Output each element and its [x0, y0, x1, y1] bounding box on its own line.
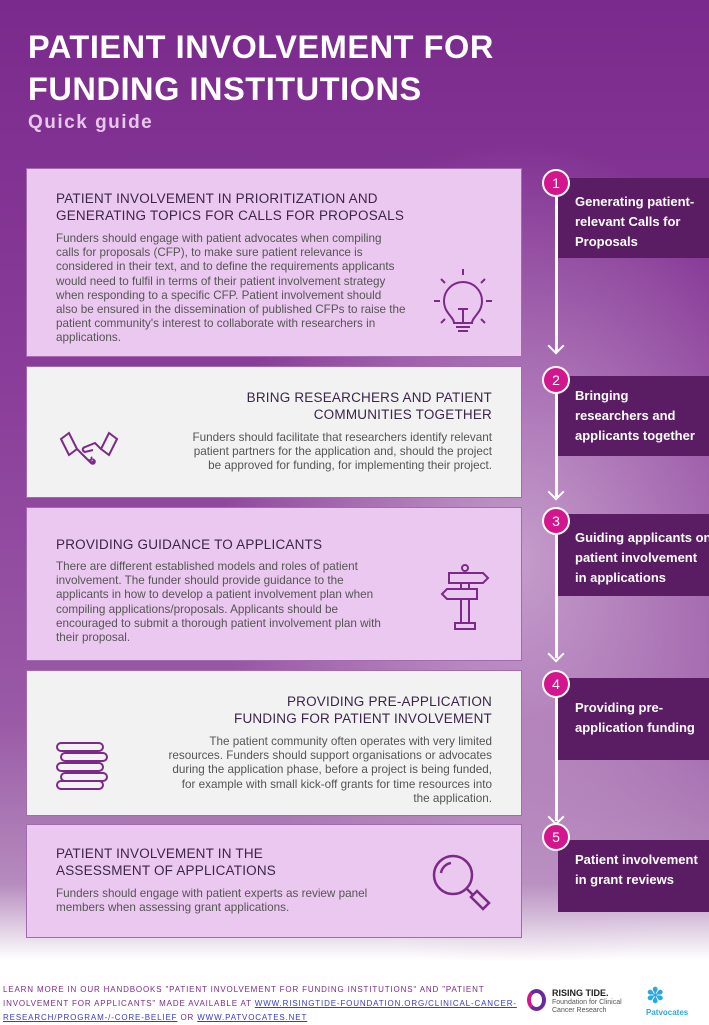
text 1: considered in their text, and to define the requirements applicants — [56, 260, 394, 273]
heading 2 — [247, 390, 492, 422]
text 1: when responding to a specific CFP. Patient involvement should — [56, 289, 381, 302]
title: PATIENT INVOLVEMENT FOR — [28, 29, 494, 65]
heading 5: PATIENT INVOLVEMENT IN THE — [56, 846, 263, 861]
icon: coins — [56, 742, 108, 790]
text 4: for example with small kick-off grants for time resources into — [182, 778, 492, 791]
footer text: RESEARCH/PROGRAM-/-CORE-BELIEF OR WWW.PATVOCATES.NET — [3, 1013, 307, 1022]
text 2 — [192, 431, 492, 472]
heading 5 — [56, 846, 276, 878]
text 2: Funders should facilitate that researchers identify relevant — [192, 431, 492, 444]
logo: rising tide — [527, 988, 622, 1014]
logo: patvocates: Patvocates — [646, 1008, 688, 1017]
subtitle: Quick guide — [28, 112, 153, 133]
text 4 — [168, 735, 492, 805]
heading 1: GENERATING TOPICS FOR CALLS FOR PROPOSALS — [56, 208, 404, 223]
text: Patient involvement — [575, 852, 698, 867]
text: Bringing — [575, 388, 628, 403]
text: in grant reviews — [575, 872, 674, 887]
text: patient involvement — [575, 550, 697, 565]
footer text: INVOLVEMENT FOR APPLICANTS" MADE AVAILABLE AT WWW.RISINGTIDE-FOUNDATION.ORG/CLINICAL-CANCER- — [3, 999, 517, 1008]
logo: rising tide: RISING TIDE. — [552, 988, 609, 998]
text 1 — [56, 232, 406, 344]
footer text — [3, 985, 517, 1022]
panel 1 — [26, 168, 522, 357]
text 3: encouraged to submit a thorough patient involvement plan with — [56, 617, 381, 630]
title: FUNDING INSTITUTIONS — [28, 71, 422, 107]
panel 3 — [26, 507, 522, 661]
text: 2 — [552, 372, 560, 388]
text 1: patient community's interest to collaborate with researchers in — [56, 317, 375, 330]
text: 5 — [552, 829, 560, 845]
text 3: applicants in how to develop a patient involvement plan when — [56, 588, 373, 601]
text: relevant Calls for — [575, 214, 680, 229]
text 4: The patient community often operates with very limited — [209, 735, 492, 748]
panel 4 — [26, 670, 522, 816]
text 4: during the application phase, before a project is being funded, — [172, 763, 492, 776]
text: researchers and — [575, 408, 675, 423]
heading 2: BRING RESEARCHERS AND PATIENT — [247, 390, 492, 405]
text 3: involvement. The funder should provide guidance to the — [56, 574, 344, 587]
step 5 — [542, 823, 709, 912]
heading 1 — [56, 191, 404, 223]
icon: magnifier — [432, 854, 491, 911]
text 2: be approved for funding, for implementing their project. — [208, 459, 492, 472]
text: in applications — [575, 570, 666, 585]
text 4: resources. Funders should support organisations or advocates — [168, 749, 492, 762]
text 5: members when assessing grant applications. — [56, 901, 289, 914]
timeline lines — [548, 196, 564, 824]
text: Generating patient- — [575, 194, 694, 209]
text: applicants together — [575, 428, 695, 443]
logo: rising tide: Foundation for Clinical — [552, 999, 622, 1006]
panel 5 — [26, 824, 522, 938]
footer text: LEARN MORE IN OUR HANDBOOKS "PATIENT INVOLVEMENT FOR FUNDING INSTITUTIONS" AND "PATIENT — [3, 985, 484, 994]
text 3: There are different established models and roles of patient — [56, 560, 358, 573]
step 4 — [542, 670, 709, 760]
text 1: calls for proposals (CFP), to make sure patient relevance is — [56, 246, 363, 259]
logo: patvocates — [646, 983, 688, 1017]
text 1: also be ensured in the dissemination of published CFPs to raise the — [56, 303, 406, 316]
heading 4: FUNDING FOR PATIENT INVOLVEMENT — [234, 711, 492, 726]
heading 5: ASSESSMENT OF APPLICATIONS — [56, 863, 276, 878]
text: Providing pre- — [575, 700, 663, 715]
heading 4: PROVIDING PRE-APPLICATION — [287, 694, 492, 709]
step 3 — [542, 507, 709, 596]
panel 2 — [26, 366, 522, 498]
text 5: Funders should engage with patient experts as review panel — [56, 887, 367, 900]
text: 1 — [552, 175, 560, 191]
text: 4 — [552, 676, 560, 692]
logo: patvocates: ✽ — [646, 983, 664, 1008]
text 3: their proposal. — [56, 631, 130, 644]
icon: light bulb — [434, 269, 492, 332]
text: application funding — [575, 720, 695, 735]
heading 4 — [234, 694, 492, 726]
text 3: compiling applications/proposals. Applicants should be — [56, 603, 338, 616]
text 3 — [56, 560, 381, 644]
heading 2: COMMUNITIES TOGETHER — [314, 407, 492, 422]
text: Guiding applicants on — [575, 530, 709, 545]
text 1: Funders should engage with patient advocates when compiling — [56, 232, 382, 245]
text 2: patient partners for the application and, should the project — [194, 445, 492, 458]
text 1: applications. — [56, 331, 121, 344]
title — [28, 29, 494, 107]
text: Proposals — [575, 234, 638, 249]
text: 3 — [552, 513, 560, 529]
text 5 — [56, 887, 367, 914]
text 4: the application. — [413, 792, 492, 805]
heading 1: PATIENT INVOLVEMENT IN PRIORITIZATION AND — [56, 191, 378, 206]
step 2 — [542, 366, 709, 456]
icon: handshake — [60, 432, 118, 465]
logo: rising tide: Cancer Research — [552, 1007, 606, 1014]
step 1 — [542, 169, 709, 258]
heading 3: PROVIDING GUIDANCE TO APPLICANTS — [56, 537, 322, 552]
text 1: would need to fulfil in terms of their patient involvement strategy — [56, 275, 385, 288]
icon: signpost — [440, 564, 490, 630]
